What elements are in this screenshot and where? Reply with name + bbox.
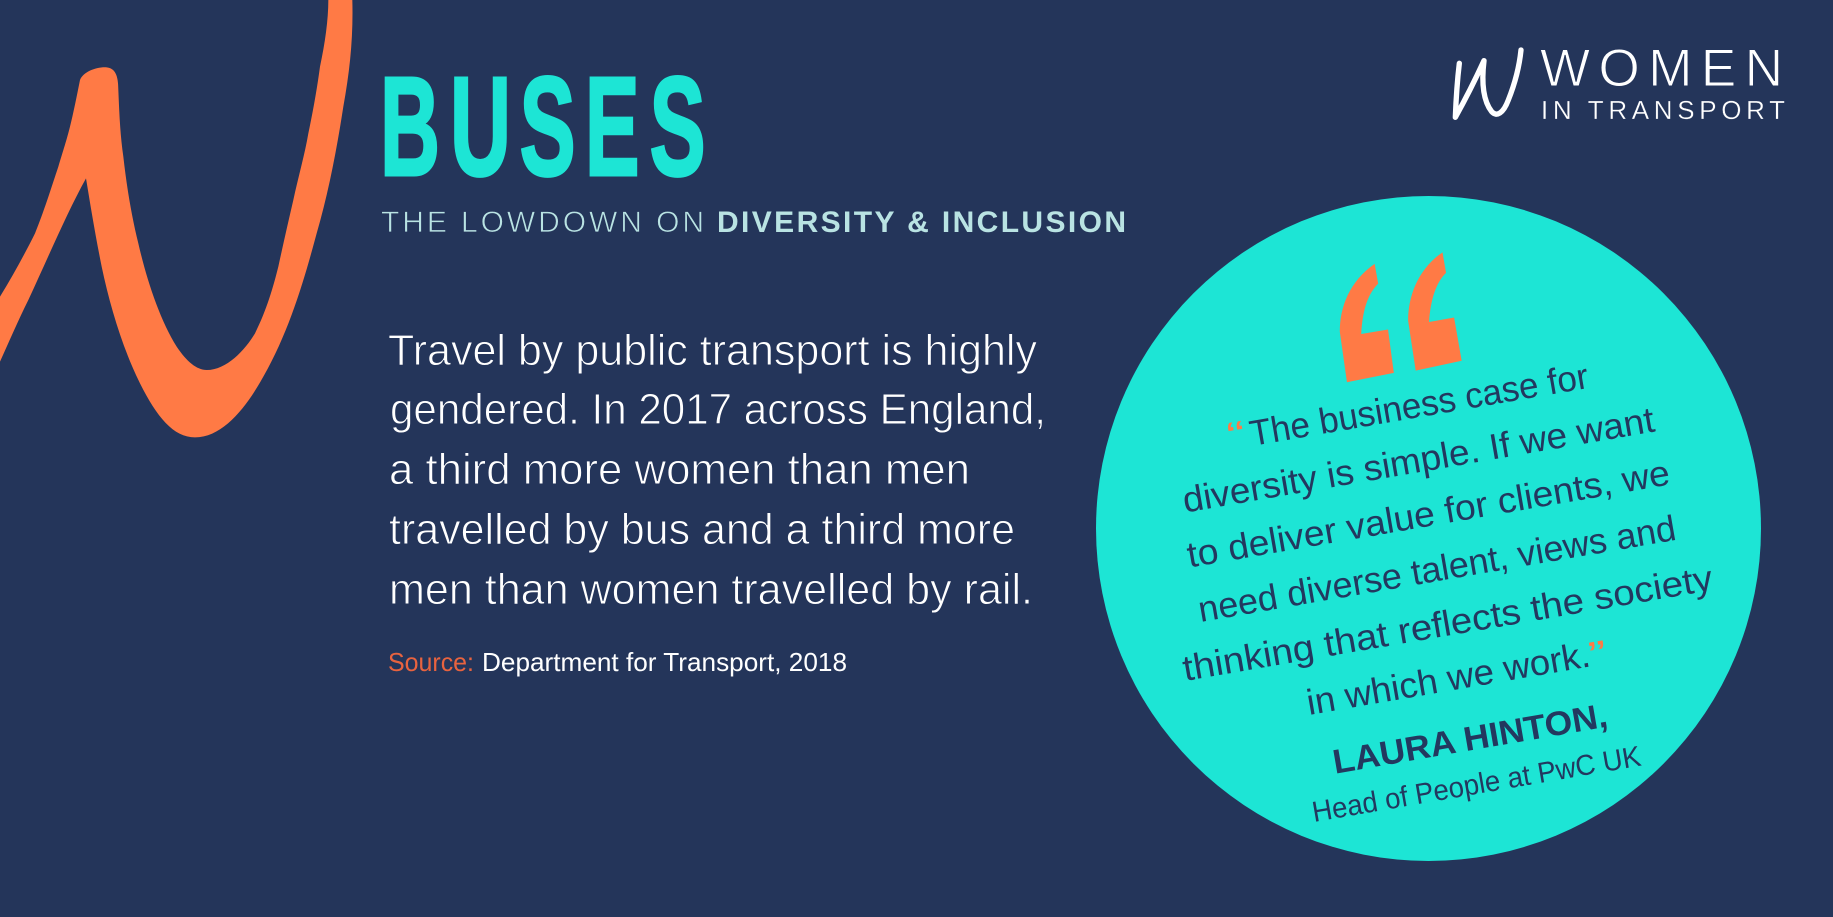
quote text: The business case for: [1246, 355, 1591, 454]
orange script W swoosh: [0, 0, 353, 437]
body paragraph: a third more women than men: [389, 445, 970, 494]
body paragraph: men than women travelled by rail.: [389, 565, 1033, 614]
body paragraph: gendered. In 2017 across England,: [390, 385, 1046, 434]
quote attribution role: Head of People at PwC UK: [1310, 741, 1644, 829]
title: S: [520, 47, 576, 205]
logo WOMEN: WOMEN: [1540, 39, 1783, 98]
quote text: in which we work.: [1303, 634, 1593, 723]
teal circle: [1096, 196, 1761, 861]
body paragraph: Travel by public transport is highly: [388, 326, 1037, 375]
title: E: [585, 47, 640, 205]
title: [380, 47, 706, 205]
body paragraph: [388, 326, 1046, 614]
logo IN TRANSPORT: IN TRANSPORT: [1541, 95, 1785, 125]
quote text: to deliver value for clients, we: [1184, 452, 1673, 575]
title: S: [650, 47, 706, 205]
logo script W: [1455, 50, 1521, 117]
quote text: [1179, 355, 1716, 723]
subtitle bold part: DIVERSITY & INCLUSION: [717, 206, 1126, 239]
quote attribution name: LAURA HINTON,: [1330, 697, 1610, 782]
quote text: thinking that reflects the society: [1179, 557, 1716, 689]
quote text: need diverse talent, views and: [1195, 507, 1679, 630]
subtitle: [381, 206, 1126, 239]
logo: women in transport: [1455, 39, 1785, 125]
quote text: ”: [1585, 632, 1610, 675]
body paragraph: travelled by bus and a third more: [389, 505, 1015, 554]
subtitle light part: THE LOWDOWN ON: [381, 206, 704, 239]
title: U: [450, 47, 511, 205]
icon: large quote marks: [1340, 252, 1462, 382]
source line: Department for Transport, 2018: [482, 647, 847, 677]
title: B: [380, 47, 440, 205]
source line: Source:: [388, 647, 474, 677]
quote panel: [1096, 196, 1761, 861]
quote text: “: [1224, 412, 1249, 456]
quote text: diversity is simple. If we want: [1179, 399, 1657, 520]
